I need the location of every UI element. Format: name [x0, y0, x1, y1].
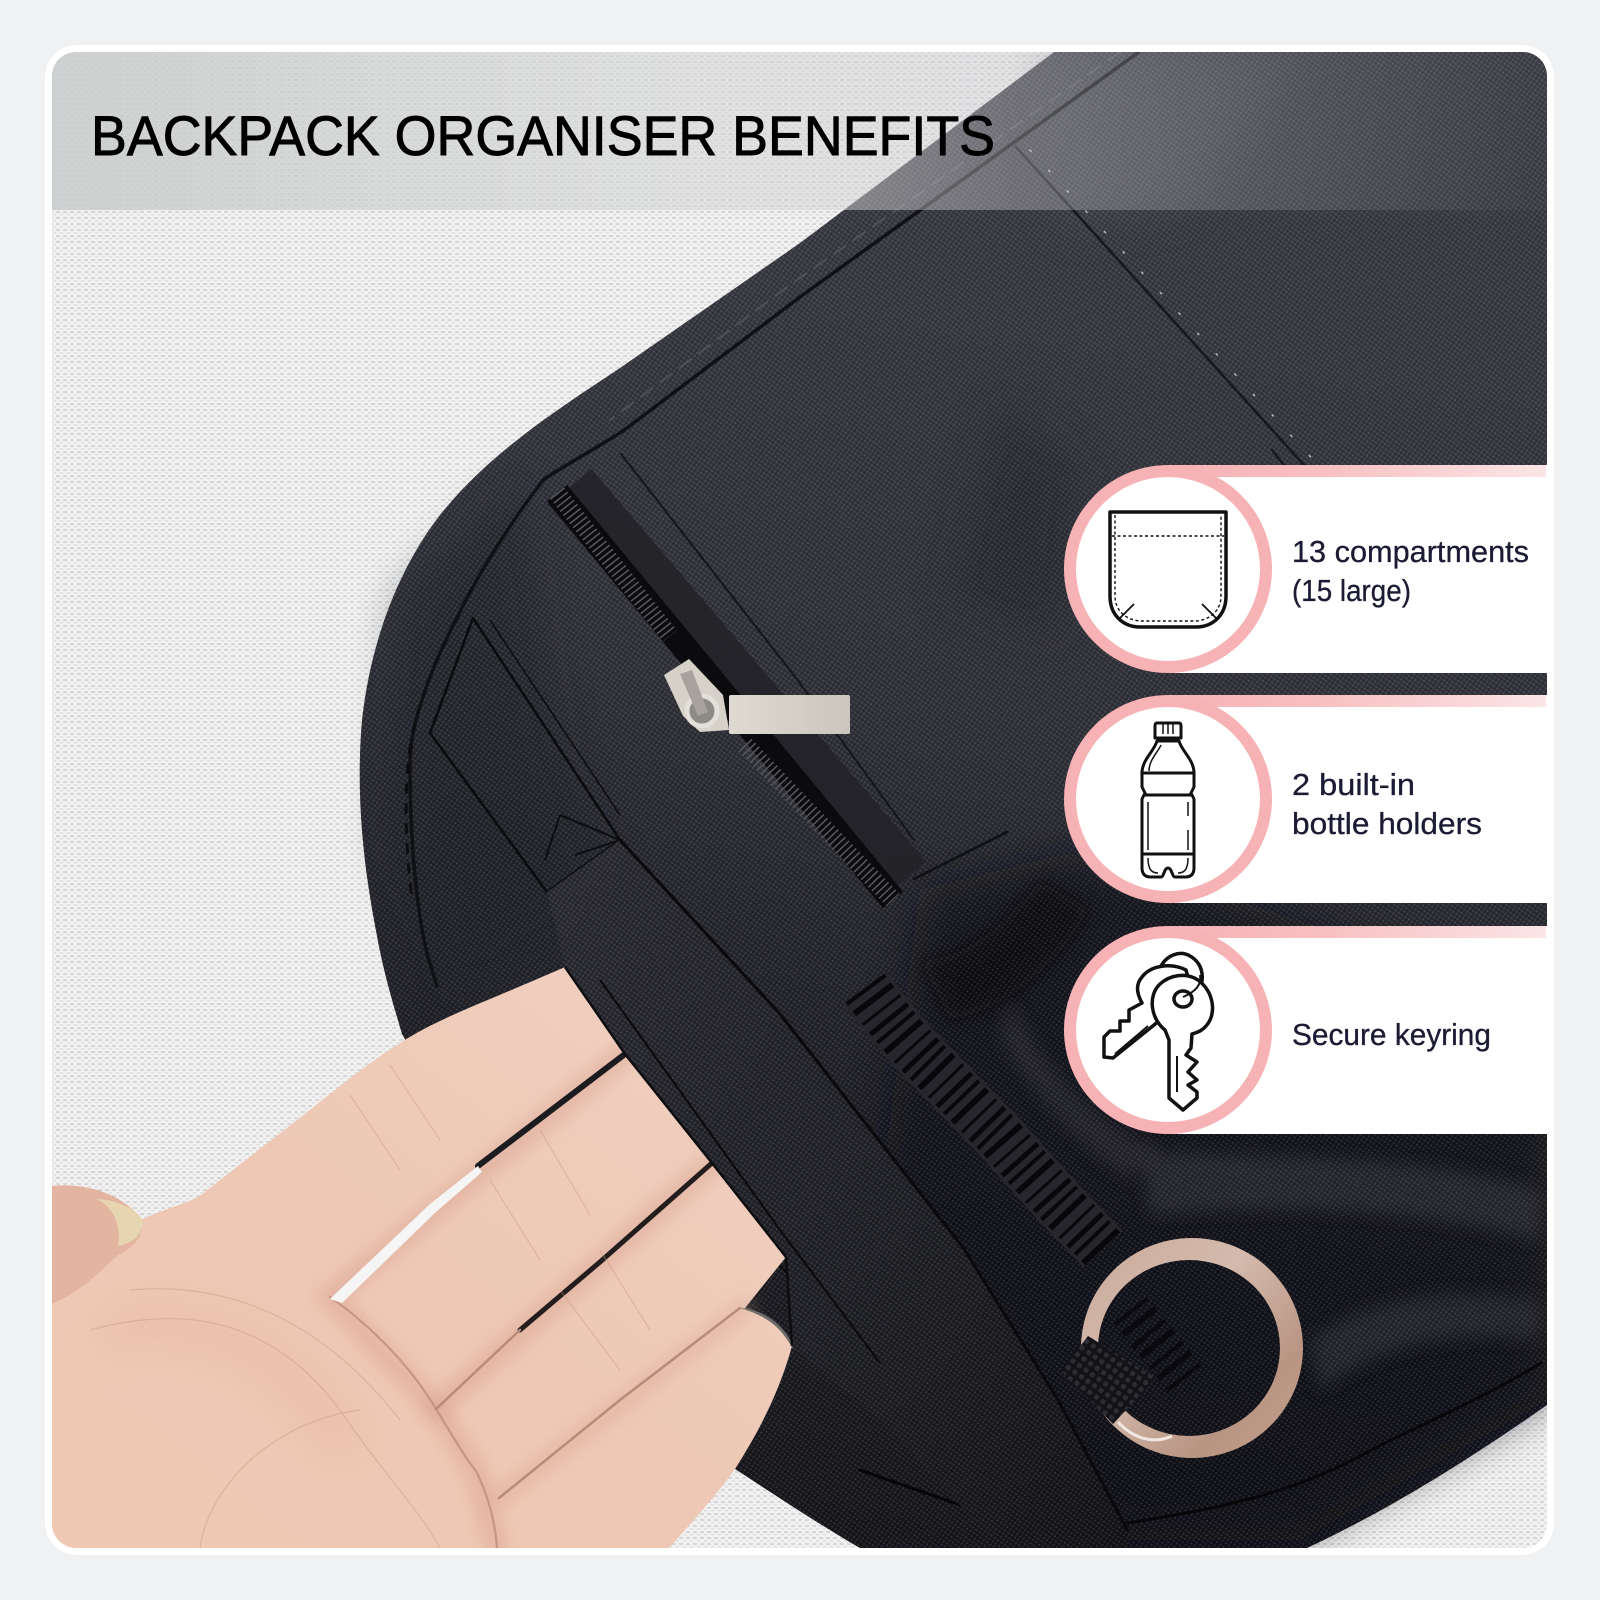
- title: BACKPACK ORGANISER BENEFITS: [91, 104, 995, 167]
- fabric weave texture: [360, 52, 1547, 1548]
- finger gaps and creases: [330, 1054, 740, 1548]
- icon circle: [1070, 701, 1266, 897]
- icon: pocket: [1110, 512, 1226, 627]
- edge binding seams: [406, 52, 1541, 1545]
- benefit row: compartments: [1070, 465, 1547, 673]
- pink top strip: [1168, 695, 1546, 707]
- elastic gather: [865, 988, 1190, 1385]
- panel: white label bar: [1168, 465, 1547, 673]
- icon: bottle: [1142, 723, 1194, 877]
- ring split highlight: [1118, 1422, 1172, 1440]
- skin tone shading: [120, 1054, 745, 1548]
- icon: keys: [1104, 953, 1213, 1110]
- fabric shading: [390, 60, 1547, 1540]
- thumb nail: [96, 1199, 143, 1246]
- strap end patch stitching: [430, 618, 620, 892]
- panel: white label bar: [1168, 926, 1547, 1134]
- label text: 13 compartments: [1292, 535, 1529, 569]
- satin fold highlights: [1140, 1150, 1540, 1240]
- benefit row: keyring: [1070, 926, 1547, 1134]
- strap over fingers: [547, 840, 1128, 1548]
- label text: bottle holders: [1292, 807, 1482, 841]
- zipper: [557, 487, 905, 900]
- pink top strip: [1168, 465, 1546, 477]
- panel: white label bar: [1168, 695, 1547, 903]
- organiser bag body: [360, 52, 1547, 1548]
- key ring loop cord: [1061, 1336, 1156, 1424]
- title band overlay: [52, 52, 1547, 210]
- label text: Secure keyring: [1292, 1018, 1491, 1052]
- metal split ring: [1081, 1238, 1303, 1458]
- thumb: [52, 1185, 143, 1304]
- zipper pull: [664, 659, 850, 734]
- benefit row: bottle holders: [1070, 695, 1547, 903]
- palm creases: [90, 1065, 650, 1548]
- icon circle: [1070, 471, 1266, 667]
- hand: [52, 967, 794, 1548]
- pinky nail: [740, 1308, 794, 1350]
- icon circle: [1070, 932, 1266, 1128]
- label text: (15 large): [1292, 574, 1411, 608]
- pink top strip: [1168, 926, 1546, 938]
- background showing between fingers: [330, 1166, 482, 1303]
- label text: 2 built-in: [1292, 768, 1415, 802]
